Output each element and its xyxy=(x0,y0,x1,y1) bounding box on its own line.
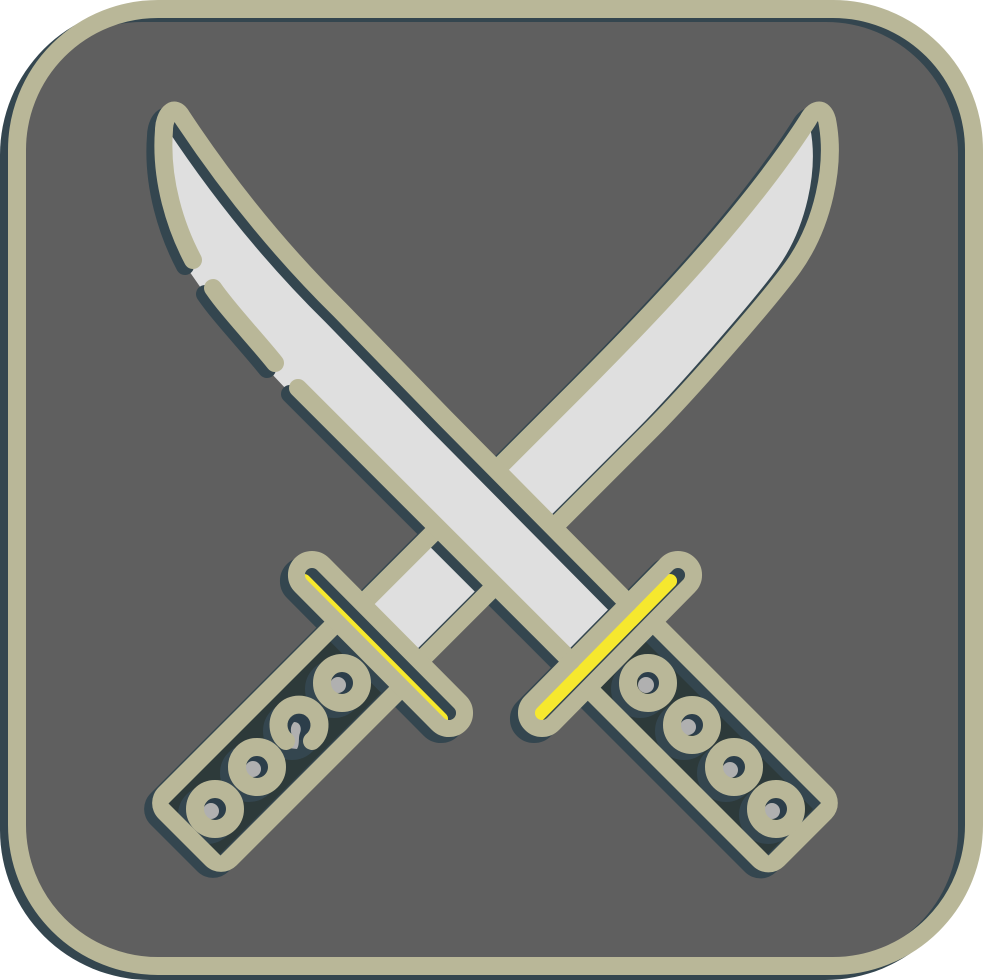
left handle holes xyxy=(203,670,354,820)
khaki outlines xyxy=(152,111,838,872)
right-leaning sword blade outline xyxy=(364,111,830,660)
right handle holes xyxy=(639,671,788,819)
left-leaning sword blade fill xyxy=(163,111,628,661)
right handle rivet rings xyxy=(628,663,796,829)
blade, handle and guard fills xyxy=(152,111,838,872)
rivet holes with grey crescents xyxy=(203,670,788,820)
right handle dark wrap xyxy=(581,616,838,872)
left guard outline xyxy=(296,559,465,729)
left guard yellow fill xyxy=(296,559,465,729)
right handle grey discs xyxy=(638,677,780,819)
left handle grey discs xyxy=(203,677,346,819)
left handle rivet rings xyxy=(195,663,362,829)
right handle outline xyxy=(581,616,838,872)
right guard outline xyxy=(526,559,694,729)
left-leaning sword blade outline with nicks xyxy=(163,111,628,661)
right-leaning sword blade fill xyxy=(364,111,830,660)
left handle outline xyxy=(152,616,408,872)
left handle dark wrap xyxy=(152,616,408,872)
right guard yellow fill xyxy=(526,559,694,729)
offset drop shadows xyxy=(144,117,830,878)
